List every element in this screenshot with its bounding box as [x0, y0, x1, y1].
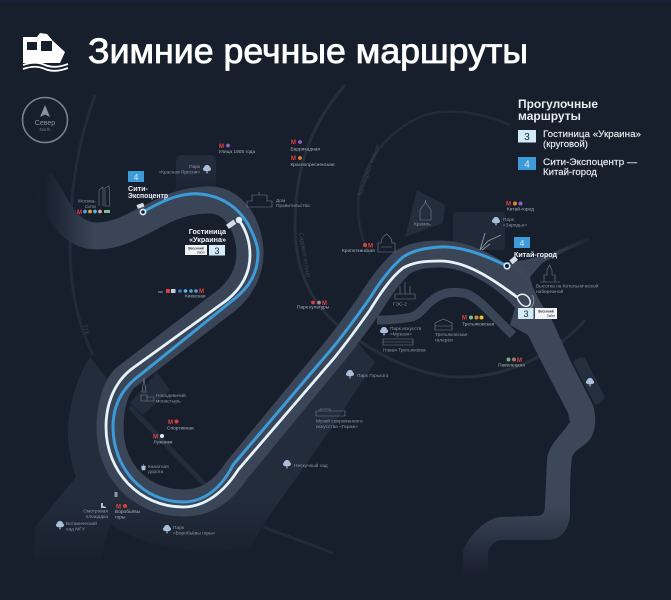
route 3: turnaround loop: [517, 294, 530, 306]
route 3: white line: [106, 220, 517, 507]
label: Kitay-gorod metro: М: [506, 202, 511, 208]
label: Kievskaya: М: [199, 289, 204, 295]
river: Yauza: [510, 237, 592, 280]
label: Moskva-Siti: [77, 186, 110, 216]
icon: park tree, right bank: [586, 378, 594, 386]
label: Paveletskaya: М: [517, 358, 522, 364]
label: Kotelnicheskaya tower: набережной: [536, 288, 563, 295]
dock: Hotel Ukraina: [226, 217, 242, 229]
label: Kievskaya: Киевская: [185, 294, 206, 300]
legend item: route 4: 4: [524, 160, 530, 170]
label: Dom Pravitelstva: Дом: [276, 198, 285, 204]
legend item: route 4: Китай-город: [543, 167, 597, 178]
label: Vorobyovy Gory: Воробьёвы: [115, 509, 141, 515]
callout: Hotel Ukraina: «Украина»: [189, 235, 226, 244]
icon: cable car station: [114, 492, 118, 497]
callout: Siti-Expocentre: Сити-: [128, 184, 149, 193]
label: observation deck: площадка: [86, 515, 108, 520]
label: Park Kultury: [297, 301, 330, 310]
river: canal: [377, 292, 513, 335]
label: Barrikadnaya: Баррикадная: [290, 146, 320, 152]
label: Krasnaya Presnya park: [158, 164, 211, 176]
area: Kremlin: [405, 190, 445, 237]
title: Зимние речные маршруты: [88, 32, 528, 71]
label: New Tretyakov: [383, 339, 426, 354]
label: Sportivnaya: [167, 420, 194, 432]
label: MGU botanical garden: [56, 520, 97, 532]
label: Kremlin: [414, 200, 431, 228]
callout: Hotel Ukraina: [185, 227, 227, 256]
callout: Kitay-gorod: [514, 237, 557, 259]
label: MGU botanical garden: сад МГУ: [66, 526, 86, 532]
label: Gorky park: Парк Горького: [357, 373, 389, 379]
label: Park Kultury: Парк культуры: [297, 304, 330, 310]
road: metro strip inside the loop: [130, 407, 207, 487]
callout: route 3 boat at turnaround: Забег: [547, 314, 556, 318]
label: Moskva-Siti: Сити: [85, 204, 96, 210]
park: Vorobyovy Gory, Neskuchny and Gorky belt: [33, 343, 375, 562]
river: main channel: [40, 180, 522, 503]
label: GES-2: [393, 282, 415, 308]
label: Tretyakovskaya: М: [462, 316, 467, 322]
label: Tretyakov gallery: галерея: [435, 338, 453, 344]
label: Vorobyovy Gory: М: [116, 504, 121, 510]
road label: garden ring: Садовое кольцо: [297, 232, 311, 279]
label: Vorobyovy Gory park: [163, 525, 216, 536]
callout: Hotel Ukraina: Весенний: [188, 246, 204, 250]
compass: Север: [35, 120, 55, 127]
callout: Hotel Ukraina: Гостиница: [189, 227, 227, 236]
callout: Kitay-gorod: Китай-город: [514, 250, 557, 259]
label: Barrikadnaya: М: [291, 140, 296, 146]
label: cable car: Канатная: [148, 464, 169, 470]
compass: North: [39, 127, 51, 132]
label: observation deck: Смотровая: [83, 508, 108, 514]
label: Ulitsa 1905 goda: М: [219, 144, 224, 150]
label: Zaryadye park: «Зарядье»: [503, 222, 527, 228]
label: Neskuchny garden: [283, 460, 328, 469]
dock: Kitay-gorod: [504, 256, 518, 269]
road label: third ring: ТТК: [81, 324, 90, 336]
label: Sportivnaya: Спортивная: [167, 426, 194, 432]
road: third ring south: [263, 527, 333, 553]
label: Novodevichy convent: монастырь: [156, 400, 181, 404]
label: Krasnopresnenskaya: Краснопресненская: [290, 162, 335, 168]
label: Moskva-Siti: М: [77, 210, 82, 216]
label: Vorobyovy Gory: [115, 504, 141, 520]
label: Tretyakovskaya: Третьяковская: [462, 322, 495, 328]
icon: boat: [23, 33, 68, 71]
label: Kropotkinskaya: Кропоткинская: [342, 248, 375, 254]
legend item: route 3: Гостиница «Украина»: [543, 129, 641, 140]
label: Novodevichy convent: [141, 378, 186, 404]
label: Kitay-gorod metro: Китай-город: [507, 206, 534, 212]
road label: boulevard ring: Бульварное кольцо: [357, 143, 382, 197]
label: Garage museum: Музей современного: [316, 418, 363, 424]
legend item: route 3: 3: [524, 132, 530, 143]
callout: Siti-Expocentre: [128, 171, 169, 200]
label: Garage museum: искусства «Гараж»: [316, 424, 358, 430]
icon: Zaryadye bridge: [480, 233, 501, 250]
label: Sportivnaya: М: [168, 420, 173, 426]
label: Krasnopresnenskaya: М: [291, 156, 296, 162]
river: downstream: [462, 262, 595, 575]
label: Gorky park: [346, 370, 389, 379]
callout: Siti-Expocentre: 4: [134, 172, 139, 182]
label: Muzeon park: Парк искусств: [390, 326, 422, 332]
label: Ulitsa 1905 goda: Улица 1905 года: [218, 149, 255, 155]
callout: Siti-Expocentre: Экспоцентр: [128, 191, 169, 200]
label: Park Kultury: М: [322, 301, 327, 307]
label: Muzeon park: [380, 326, 422, 338]
label: Krasnaya Presnya park: «Красная Пресня»: [158, 170, 200, 176]
label: GES-2: ГЭС-2: [393, 302, 407, 308]
callout: route 3 boat at turnaround: Весенний: [538, 310, 554, 314]
legend: [518, 97, 641, 178]
label: Tretyakov gallery: Третьяковская: [435, 332, 468, 338]
compass: [22, 98, 68, 142]
label: Barrikadnaya: [290, 140, 320, 152]
label: New Tretyakov: Новая Третьяковка: [383, 348, 426, 354]
turnaround arrow: [522, 295, 534, 310]
dock: Siti-Expocentre: [136, 203, 146, 215]
label: Vorobyovy Gory park: «Воробьёвы горы»: [173, 530, 216, 536]
label: Kitay-gorod metro: [506, 202, 534, 212]
label: Luzhniki: М: [153, 434, 158, 440]
legend item: route 3: [518, 129, 641, 150]
label: Vorobyovy Gory: горы: [115, 516, 126, 520]
callout: Hotel Ukraina: Забег: [197, 250, 206, 254]
road: boulevard ring: [358, 112, 510, 255]
label: Kievskaya: [158, 289, 206, 300]
label: Ulitsa 1905 goda: [218, 144, 255, 155]
park: Krasnaya Presnya: [176, 155, 216, 200]
legend item: route 3: (круговой): [543, 139, 588, 150]
icon: Cathedral of Christ the Saviour: [378, 234, 395, 252]
label: Dom Pravitelstva: Правительства: [276, 203, 310, 209]
label: cable car: дорога: [148, 470, 163, 475]
callout: Hotel Ukraina: 3: [214, 246, 220, 256]
legend item: route 4: Сити-Экспоцентр —: [543, 157, 637, 168]
park: Zaryadye: [453, 212, 505, 250]
label: Moskva-Siti: Москва-: [78, 198, 96, 204]
park: Novodevichy area: [130, 372, 170, 415]
callout: route 3 boat at turnaround: [518, 308, 557, 319]
label: observation deck: [83, 503, 108, 520]
callout: route 3 boat at turnaround: 3: [523, 309, 529, 319]
label: Kropotkinskaya: [342, 243, 375, 254]
label: Kremlin: Кремль: [414, 222, 431, 228]
label: Kotelnicheskaya tower: Высотка на Котельнической: [536, 282, 599, 290]
label: Vorobyovy Gory park: Парк: [173, 525, 185, 531]
label: Luzhniki: [153, 434, 173, 446]
legend item: route 4: [518, 157, 637, 178]
label: Kropotkinskaya: М: [368, 244, 373, 250]
label: Luzhniki: Лужники: [154, 440, 173, 446]
label: Neskuchny garden: Нескучный сад: [294, 462, 328, 469]
label: Kotelnicheskaya tower: [536, 265, 599, 295]
label: Novodevichy convent: Новодевичий: [156, 392, 186, 399]
road: garden ring: [295, 85, 585, 377]
label: cable car: [142, 464, 169, 475]
label: MGU botanical garden: Ботанический: [66, 520, 97, 527]
label: Tretyakovskaya: [462, 316, 495, 328]
label: Dom Pravitelstva: [247, 192, 310, 209]
park: right bank: [573, 358, 605, 405]
label: Muzeon park: «Музеон»: [390, 332, 412, 338]
label: Krasnopresnenskaya: [290, 156, 335, 168]
road: third ring west: [70, 95, 95, 355]
legend heading: Прогулочные: [518, 97, 598, 111]
label: Tretyakov gallery: [435, 319, 468, 344]
legend heading: маршруты: [518, 109, 581, 123]
label: Paveletskaya: Павелецкая: [498, 362, 525, 368]
label: Garage museum: [316, 409, 363, 430]
callout: Kitay-gorod: 4: [520, 238, 525, 248]
label: Zaryadye park: [492, 217, 527, 228]
label: Paveletskaya: [498, 358, 525, 368]
label: Krasnaya Presnya park: Парк: [189, 164, 201, 170]
label: Zaryadye park: Парк: [503, 217, 515, 223]
route 4: blue line: [113, 194, 507, 502]
label: Kievskaya: икс: [158, 290, 164, 294]
